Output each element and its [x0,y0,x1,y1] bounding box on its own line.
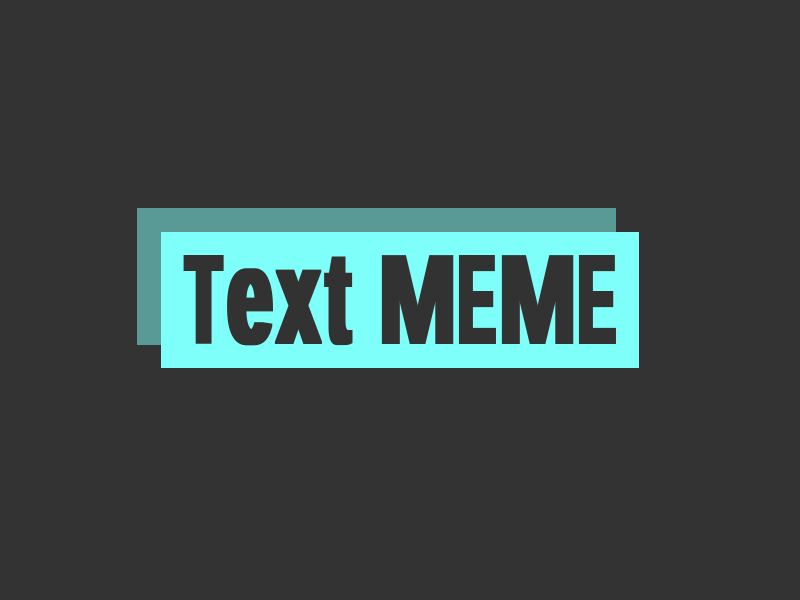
word: Text: t [327,224,349,371]
word: MEME: M [379,229,456,370]
word: MEME: M [499,229,576,370]
front panel [161,232,639,368]
shadow panel [137,208,616,345]
word: Text: e [228,220,272,373]
title: Text MEME [187,220,615,373]
word: Text: T [187,229,220,370]
logo graphic: E [578,229,615,370]
word: Text: x [278,220,319,373]
word: MEME: E [458,229,495,370]
